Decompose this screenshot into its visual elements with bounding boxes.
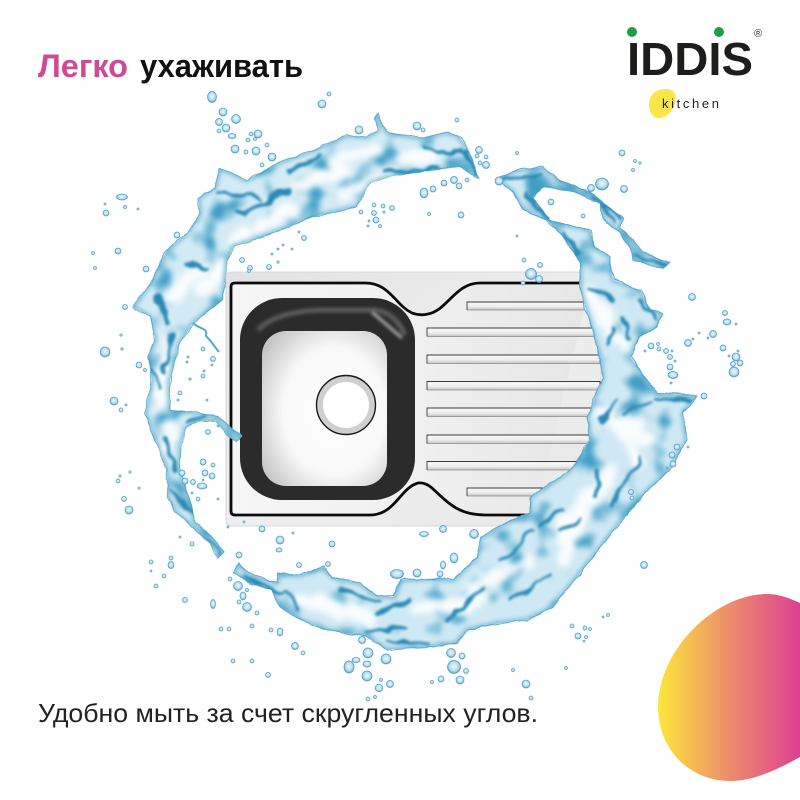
water texture xyxy=(240,167,686,647)
sink plate xyxy=(226,272,601,526)
logo wordmark: IDDIS xyxy=(627,33,753,85)
water splash: right arc xyxy=(232,166,698,651)
bowl xyxy=(240,298,415,500)
water droplets xyxy=(92,92,743,701)
drain xyxy=(316,376,376,434)
title: Легко xyxy=(38,48,128,84)
drainer ridges xyxy=(427,302,602,496)
water splash: left arc xyxy=(132,112,480,559)
sink groove outline xyxy=(231,283,590,515)
sink xyxy=(226,272,602,526)
gradient blob xyxy=(658,594,800,781)
bowl floor xyxy=(262,331,387,486)
logo: IDDIS kitchen xyxy=(627,27,762,118)
caption: Удобно мыть за счет скругленных углов. xyxy=(38,698,538,728)
logo subline: kitchen xyxy=(662,96,719,111)
water strand curl xyxy=(193,323,219,352)
logo yellow blob xyxy=(649,89,676,118)
title: ухаживать xyxy=(140,48,303,84)
registered mark: ® xyxy=(754,28,762,40)
water texture xyxy=(148,132,475,547)
logo green dots xyxy=(627,27,724,37)
